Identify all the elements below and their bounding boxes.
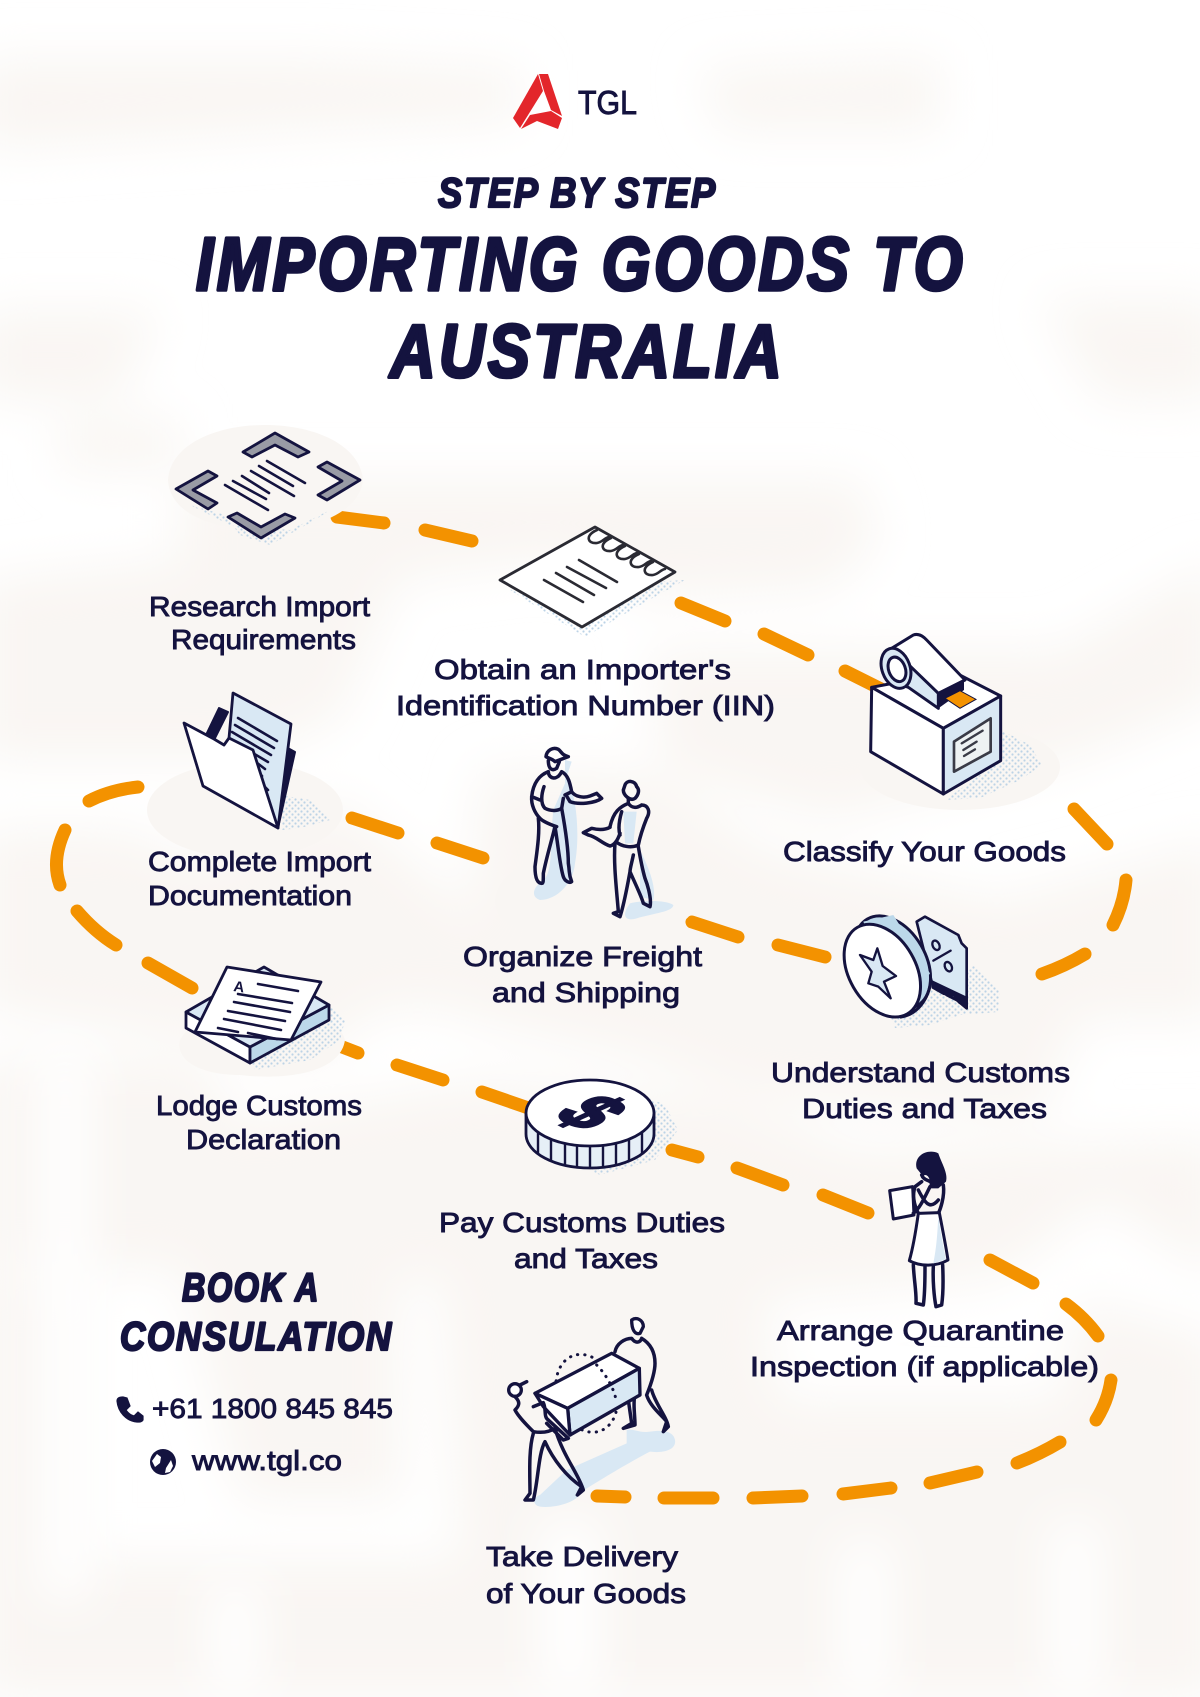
- heading: BOOK A: [182, 1266, 320, 1310]
- label: [149, 591, 370, 655]
- label: and Shipping: [492, 977, 680, 1008]
- icon: phone: [117, 1397, 143, 1422]
- icon: scan frame and document: [168, 425, 363, 545]
- subtitle: STEP BY STEP: [438, 169, 717, 216]
- label: Inspection (if applicable): [750, 1351, 1099, 1382]
- label: Documentation: [148, 880, 352, 911]
- step 10: take delivery: [486, 1319, 686, 1609]
- website: www.tgl.co: [191, 1445, 342, 1476]
- step 3: classify goods: [783, 634, 1066, 867]
- label: [486, 1541, 686, 1609]
- label: Declaration: [186, 1124, 341, 1155]
- label: Pay Customs Duties: [439, 1207, 725, 1238]
- icon: two people talking: [495, 748, 693, 940]
- heading: CONSULATION: [120, 1315, 393, 1359]
- icon: globe: [150, 1449, 176, 1475]
- call to action: book a consultation: [117, 1266, 393, 1476]
- logo: TGL: [513, 74, 637, 129]
- icon: folder with papers: [147, 693, 343, 858]
- icon: notepad: [500, 527, 685, 637]
- step 2: obtain IIN: [396, 527, 775, 721]
- logo mark: [513, 74, 562, 129]
- icon: two movers carrying a box: [509, 1319, 675, 1507]
- label: Understand Customs: [771, 1057, 1070, 1088]
- step 1: research import requirements: [149, 425, 370, 655]
- label: Research Import: [149, 591, 370, 622]
- label: Complete Import: [148, 846, 371, 877]
- label: [463, 941, 702, 1008]
- icon: box with tape dispenser: [860, 634, 1060, 810]
- dashed orange route: [56, 517, 1126, 1498]
- step 4: understand duties: [771, 902, 1070, 1124]
- label: Obtain an Importer's: [434, 654, 731, 685]
- label: Duties and Taxes: [802, 1093, 1047, 1124]
- label: [771, 1057, 1070, 1124]
- label: Requirements: [171, 624, 356, 655]
- title: IMPORTING GOODS TO: [196, 222, 966, 306]
- icon: document stack: A: [232, 978, 246, 996]
- icon: dollar coin: [526, 1080, 678, 1175]
- logo wordmark: TGL: [578, 84, 637, 121]
- heading: [120, 1266, 393, 1359]
- label: [439, 1207, 725, 1274]
- label: Identification Number (IIN): [396, 690, 775, 721]
- label: Organize Freight: [463, 941, 702, 972]
- step 9: quarantine inspection: [750, 1152, 1099, 1382]
- title: AUSTRALIA: [388, 309, 785, 393]
- label: of Your Goods: [486, 1578, 686, 1609]
- label: Take Delivery: [486, 1541, 678, 1572]
- label: Arrange Quarantine: [777, 1315, 1064, 1346]
- phone number: +61 1800 845 845: [152, 1393, 393, 1424]
- step 5: organize freight: [463, 748, 702, 1008]
- label: and Taxes: [514, 1243, 658, 1274]
- icon: woman with clipboard: [890, 1152, 948, 1307]
- step 7: lodge declaration: [156, 967, 362, 1155]
- step 8: pay duties: [439, 1080, 725, 1274]
- step 6: complete documentation: [147, 693, 371, 911]
- label: Classify Your Goods: [783, 836, 1066, 867]
- icon: dollar coin: $: [535, 1086, 648, 1139]
- icon: document stack: [179, 967, 345, 1077]
- label: Lodge Customs: [156, 1090, 362, 1121]
- label: [750, 1315, 1099, 1382]
- icon: coin and tag: [828, 902, 1018, 1042]
- label: [396, 654, 775, 721]
- title: [196, 222, 966, 393]
- label: [156, 1090, 362, 1155]
- label: [148, 846, 371, 911]
